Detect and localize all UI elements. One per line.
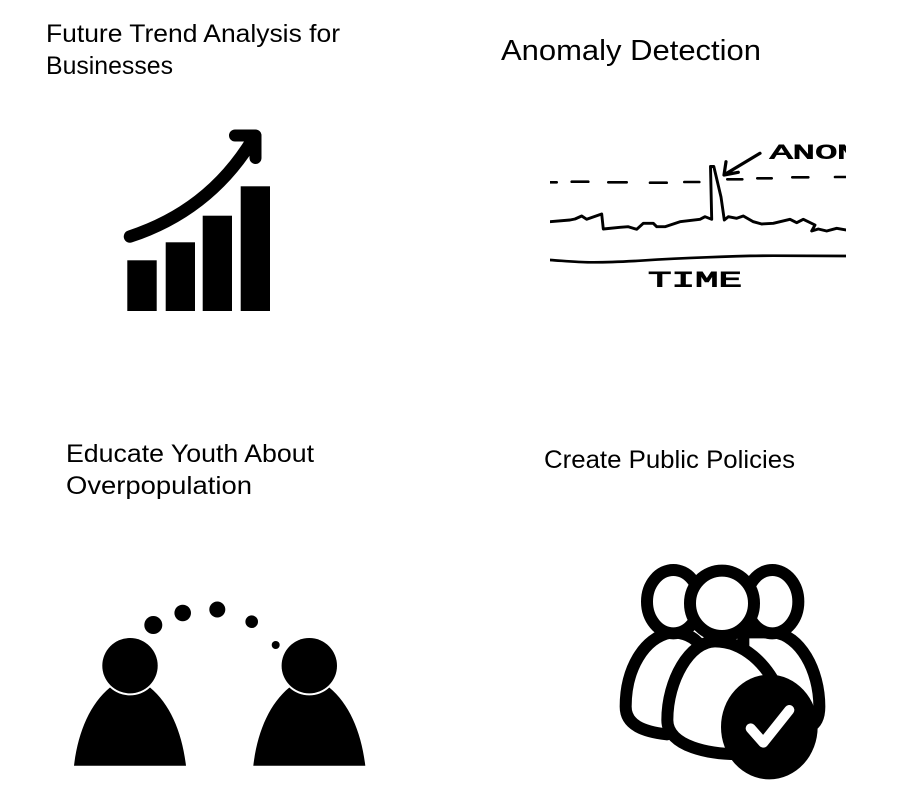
- heading: educate youth about overpopulation: [66, 440, 314, 500]
- icon: two people talking: [74, 602, 365, 766]
- panel: create public policies: [544, 446, 819, 779]
- heading: future trend analysis: [46, 20, 340, 80]
- heading: educate youth about overpopulation: Educate Youth About: [66, 440, 314, 468]
- heading: educate youth about overpopulation: Overpopulation: [66, 472, 252, 500]
- chart: hand-drawn anomaly sketch: [550, 153, 846, 262]
- heading: anomaly detection: Anomaly Detection: [501, 35, 761, 67]
- label: anomaly (clipped): ANOM: [770, 142, 860, 166]
- heading: future trend analysis: Future Trend Analysis for: [46, 20, 340, 48]
- panel: future trend analysis: [46, 20, 340, 311]
- heading: create public policies: Create Public Policies: [544, 446, 795, 474]
- label: time: TIME: [648, 268, 742, 294]
- heading: future trend analysis: Businesses: [46, 52, 173, 80]
- icon: group of people with check mark: [626, 570, 819, 779]
- icon: rising bar chart with arrow: [127, 136, 270, 311]
- panel: anomaly detection: [501, 35, 860, 294]
- panel: educate youth: [66, 440, 365, 766]
